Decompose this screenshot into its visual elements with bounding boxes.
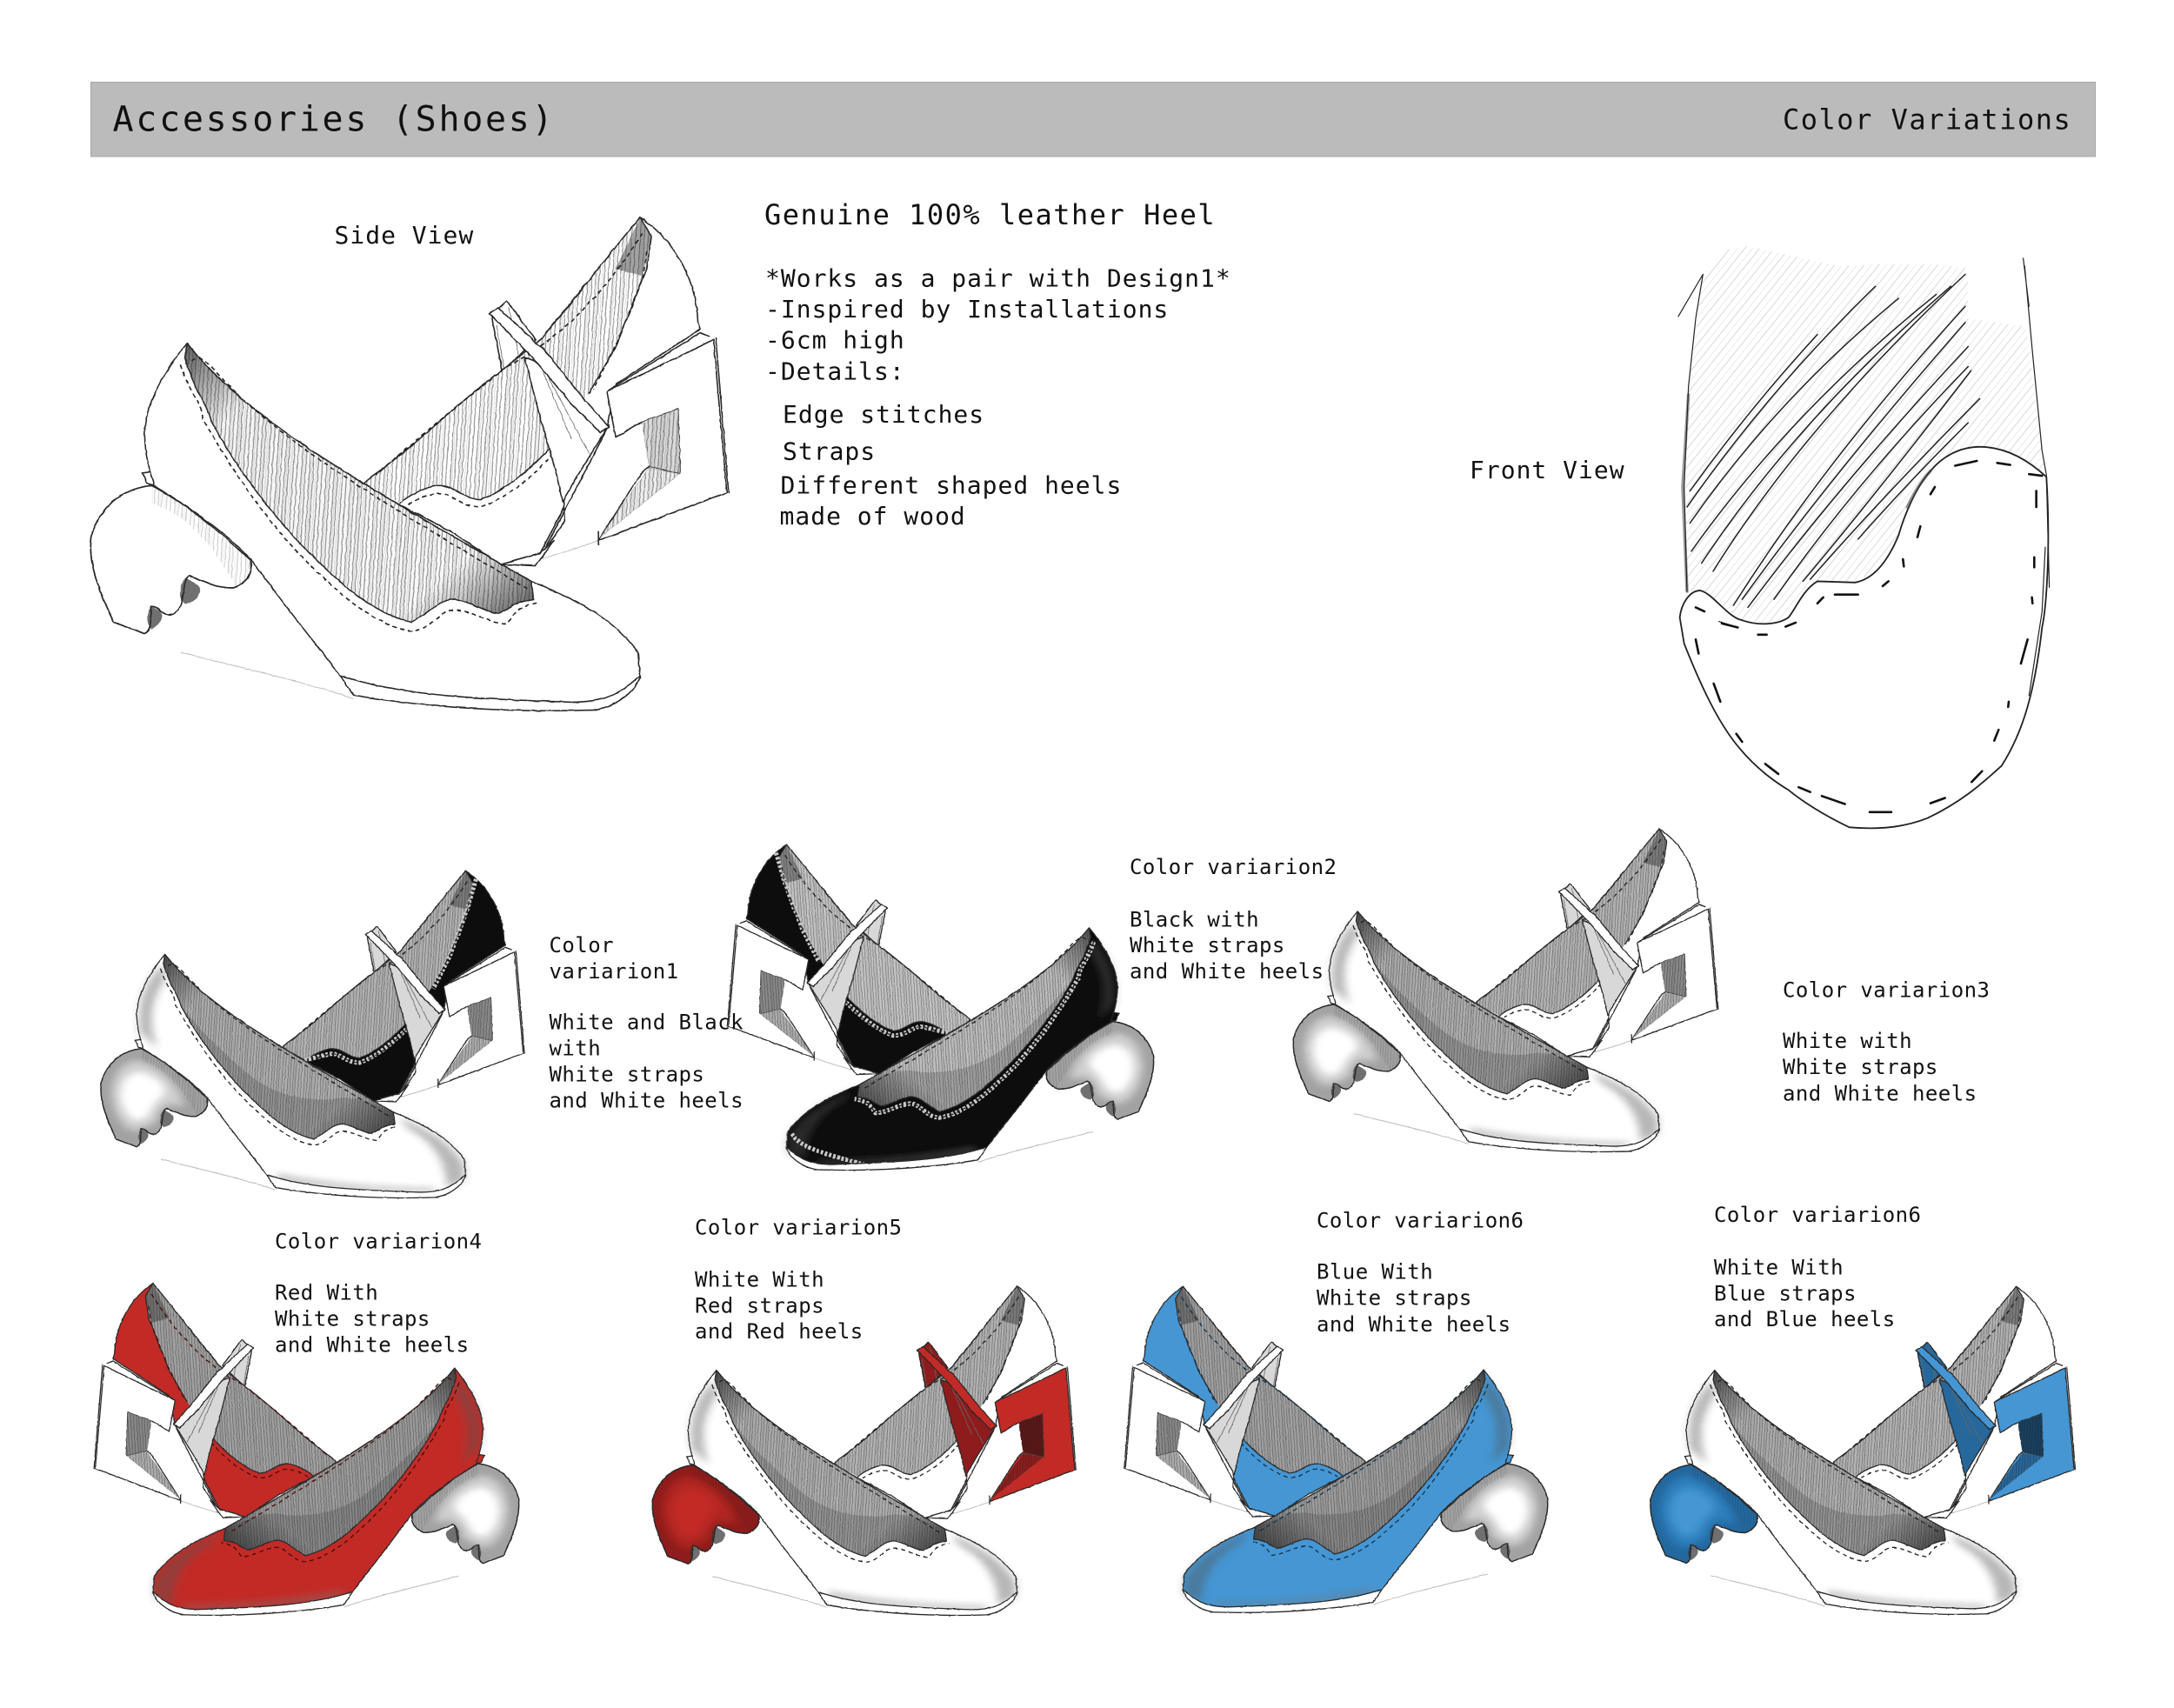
- header banner: [90, 82, 2096, 157]
- caption: and Red heels: [695, 1319, 864, 1344]
- feature list: made of wood: [779, 502, 966, 530]
- description heading: Genuine 100% leather Heel: [764, 198, 1216, 231]
- feature list: -Details:: [765, 357, 905, 386]
- text block: product description: [764, 198, 1231, 530]
- caption: White With: [1714, 1256, 1844, 1280]
- feature list: -Inspired by Installations: [765, 295, 1169, 324]
- panel: color variation 1: [101, 871, 744, 1198]
- caption: Black with: [1130, 908, 1259, 932]
- caption: White straps: [275, 1306, 430, 1331]
- caption: [1783, 977, 1990, 1106]
- label: side view: Side View: [334, 221, 474, 250]
- caption: Blue With: [1317, 1259, 1433, 1284]
- caption: and Blue heels: [1714, 1307, 1896, 1331]
- caption: Red With: [275, 1280, 378, 1304]
- caption: [1714, 1203, 1921, 1331]
- panel: color variation 3: [1293, 829, 1990, 1152]
- caption: Color variarion3: [1783, 977, 1990, 1002]
- shoes: white with red straps and heels: [652, 1286, 1076, 1615]
- caption: White straps: [1317, 1285, 1472, 1310]
- caption: and White heels: [1783, 1082, 1977, 1106]
- feature list: Edge stitches: [783, 400, 984, 429]
- shoes: blue with white straps and heels: [1124, 1286, 1548, 1612]
- caption: Color: [550, 933, 614, 957]
- caption: and White heels: [1130, 959, 1324, 984]
- shoes: white: [1293, 829, 1718, 1152]
- feature list: Straps: [783, 437, 876, 466]
- caption: Color variarion5: [695, 1216, 902, 1240]
- subtitle: Color Variations: [1783, 103, 2071, 136]
- caption: [1130, 855, 1337, 984]
- caption: and White heels: [275, 1332, 470, 1357]
- caption: [275, 1230, 482, 1357]
- caption: with: [550, 1037, 601, 1061]
- caption: White With: [695, 1268, 824, 1292]
- illustration: front view pencil sketch: [1678, 246, 2050, 828]
- title: Accessories (Shoes): [113, 99, 555, 139]
- caption: Red straps: [695, 1294, 824, 1318]
- caption: and White heels: [550, 1089, 744, 1113]
- panel: color variation 4: [94, 1230, 519, 1615]
- shoes: white and black: [101, 871, 524, 1198]
- panel: color variation 6 white with blue: [1651, 1203, 2075, 1614]
- caption: White straps: [1130, 933, 1285, 957]
- shoes: black: [727, 844, 1154, 1171]
- caption: and White heels: [1317, 1312, 1511, 1337]
- caption: variarion1: [550, 959, 678, 984]
- feature list: -6cm high: [765, 325, 905, 355]
- caption: White straps: [1783, 1055, 1938, 1079]
- feature list: [765, 264, 1231, 530]
- label: front view: Front View: [1470, 456, 1625, 484]
- caption: [1317, 1209, 1524, 1337]
- caption: Color variarion6: [1714, 1203, 1921, 1227]
- shoes: white with blue straps and heels: [1651, 1286, 2075, 1614]
- caption: White with: [1783, 1029, 1912, 1053]
- panel: color variation 5: [652, 1216, 1076, 1615]
- caption: Color variarion4: [275, 1230, 482, 1254]
- illustration: side view pencil sketch of shoes: [90, 217, 729, 711]
- caption: Color variarion6: [1317, 1209, 1524, 1233]
- caption: White and Black: [550, 1011, 744, 1035]
- panel: color variation 2: [727, 844, 1337, 1171]
- caption: [695, 1216, 902, 1344]
- caption: Blue straps: [1714, 1282, 1857, 1306]
- caption: [550, 933, 744, 1113]
- caption: White straps: [550, 1063, 704, 1087]
- panel: color variation 6 blue: [1124, 1209, 1548, 1612]
- feature list: Different shaped heels: [781, 471, 1122, 499]
- caption: Color variarion2: [1130, 855, 1337, 879]
- shoes: red with white straps and heels: [94, 1284, 519, 1615]
- feature list: *Works as a pair with Design1*: [765, 264, 1231, 292]
